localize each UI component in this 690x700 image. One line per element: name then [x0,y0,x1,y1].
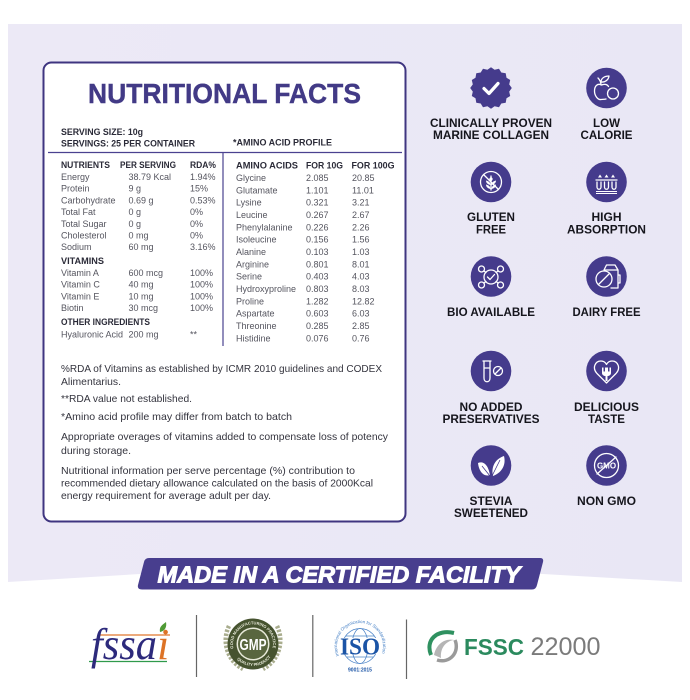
title: NUTRITIONAL FACTS [88,78,361,109]
nutrients table: RDA% [190,160,216,170]
footnotes: %RDA of Vitamins as established by ICMR 2010 guidelines and CODEX [61,363,382,375]
logo: ISO 9001:2015: ISO [340,634,380,660]
footnotes: energy requirement for average adult per day. [61,490,271,502]
amino acids table: Glycine [236,173,266,183]
nutrients table: Carbohydrate [61,195,116,205]
amino acids table: Arginine [236,259,269,269]
amino acids table: Threonine [236,321,277,331]
amino acids table: 4.03 [352,272,370,282]
amino acids table: 8.03 [352,284,370,294]
amino acids table: 6.03 [352,309,370,319]
nutrients table: OTHER INGREDIENTS [61,317,150,327]
amino acids table: Glutamate [236,185,278,195]
feature: low calorie: LOW [593,116,621,130]
nutrients table: 15% [190,184,208,194]
logo: FSSC 22000 [429,632,600,661]
amino acids table: 2.085 [306,173,329,183]
amino acids table: 2.67 [352,210,370,220]
amino acids table: Serine [236,272,262,282]
nutrients table: PER SERVING [120,160,176,170]
feature: non gmo: NON GMO [577,494,636,508]
nutrients table: 100% [190,291,213,301]
amino acids table: 0.803 [306,284,329,294]
amino acids table: 20.85 [352,173,375,183]
feature: low calorie [580,68,632,142]
amino acids table: 0.603 [306,309,329,319]
amino acids table: 2.85 [352,321,370,331]
nutrients table: 0% [190,207,203,217]
feature: no added preservatives [442,351,540,426]
nutrients table: 40 mg [128,280,154,290]
feature: gluten free [467,162,515,236]
amino acids table: 0.226 [306,222,329,232]
logo: fssai: fssa [91,620,157,669]
feature: clinically proven marine collagen [430,67,552,142]
amino acids table: Hydroxyproline [236,284,296,294]
amino acids table: Leucine [236,210,268,220]
nutrients table: Total Fat [61,207,96,217]
nutrients table: Sodium [61,242,92,252]
footnotes: *Amino acid profile may differ from batch to batch [61,411,292,423]
amino acids table: Aspartate [236,309,275,319]
feature: gluten free: GLUTEN [467,210,515,224]
feature: clinically proven marine collagen: MARINE COLLAGEN [433,128,549,142]
logo divider [312,615,314,677]
amino acids table: 0.267 [306,210,329,220]
nutrients table [61,160,216,340]
nutrients table: VITAMINS [61,256,104,266]
feature: bio available: BIO AVAILABLE [447,305,535,319]
feature: high absorption [567,162,646,236]
logo: ISO 9001:2015: International Organization for Standardization [334,620,386,656]
banner: made in a certified facility: MADE IN A CERTIFIED FACILITY [158,562,523,588]
feature: no added preservatives: NO ADDED [460,400,523,414]
amino acids table: 0.156 [306,235,329,245]
nutrients table: 0.69 g [128,195,154,205]
nutrients table: 100% [190,280,213,290]
amino acids table: 0.321 [306,198,329,208]
amino acids table: 1.101 [306,185,329,195]
footnotes: **RDA value not established. [61,393,192,405]
footnotes [61,363,389,502]
amino acids table: 1.56 [352,235,370,245]
nutrition card [44,62,406,522]
nutrients table: 0 g [128,219,141,229]
amino acids table: 11.01 [352,185,374,195]
logo: FSSC 22000: 22000 [530,633,600,661]
amino acids table: 0.285 [306,321,329,331]
feature: stevia sweetened: SWEETENED [454,506,528,520]
feature: clinically proven marine collagen: CLINICALLY PROVEN [430,116,552,130]
logo divider [406,620,408,679]
nutrients table: 9 g [128,184,141,194]
feature: high absorption: HIGH [592,210,622,224]
amino acids table: 3.21 [352,198,370,208]
amino acid profile heading: *AMINO ACID PROFILE [233,138,332,148]
amino acids table: Alanine [236,247,266,257]
amino acids table: Isoleucine [236,235,277,245]
feature: delicious taste: TASTE [588,412,625,426]
feature: gluten free: FREE [476,222,506,236]
amino acids table: 0.801 [306,259,329,269]
nutrients table: 100% [190,303,213,313]
nutrients table: 10 mg [128,291,154,301]
logo divider [196,615,198,677]
serving information: SERVINGS: 25 PER CONTAINER [61,138,195,148]
nutrients table: Hyaluronic Acid [61,330,123,340]
nutrients table: Protein [61,184,90,194]
footnotes: recommended dietary allowance calculated on the basis of 2000Kcal [61,478,373,490]
logo: GMP badge [224,618,282,671]
amino acids table: 2.26 [352,222,370,232]
feature: stevia sweetened: STEVIA [470,494,513,508]
nutrients table: 0.53% [190,195,216,205]
logo: FSSC 22000: FSSC [464,634,524,660]
nutrients table: 30 mcg [128,303,158,313]
amino acids table: 8.01 [352,259,370,269]
nutrients table: 0% [190,219,203,229]
feature: no added preservatives: PRESERVATIVES [442,412,540,426]
feature: non gmo [577,445,636,508]
feature: delicious taste: DELICIOUS [574,400,639,414]
nutrients table: 38.79 Kcal [128,172,171,182]
nutrients table: 0 g [128,207,141,217]
footnotes: Nutritional information per serve percentage (%) contribution to [61,465,355,477]
logo: fssai: i [157,620,169,669]
nutrients table: 200 mg [128,330,159,340]
amino acids table: 0.403 [306,272,329,282]
amino acids table: Phenylalanine [236,222,293,232]
feature: stevia sweetened [454,445,528,520]
nutrients table: 60 mg [128,242,154,252]
nutrients table: 0 mg [128,230,149,240]
nutrients table: Cholesterol [61,230,107,240]
footnotes: Appropriate overages of vitamins added to compensate loss of potency [61,431,389,443]
logo: ISO 9001:2015 [334,620,386,674]
amino acids table: AMINO ACIDS [236,160,298,170]
amino acids table: 0.76 [352,333,370,343]
serving information [61,127,195,148]
feature: dairy free [572,256,640,319]
amino acids table [236,160,394,343]
nutrients table: NUTRIENTS [61,160,110,170]
feature: bio available [447,256,535,319]
nutrients table: ** [190,330,198,340]
amino acids table: Lysine [236,198,262,208]
nutrients table: 600 mcg [128,268,163,278]
feature: non gmo: GMO [597,462,616,470]
logo: ISO 9001:2015: 9001:2015 [348,668,372,674]
nutrients table: Energy [61,172,90,182]
nutrients table: Biotin [61,303,84,313]
table rules [48,152,402,346]
amino acids table: 0.076 [306,333,329,343]
amino acids table: 0.103 [306,247,329,257]
footnotes: during storage. [61,445,131,457]
amino acids table: FOR 100G [352,160,394,170]
nutrients table: 1.94% [190,172,216,182]
nutrients table: Vitamin E [61,291,99,301]
amino acids table: Proline [236,296,264,306]
nutrients table: 0% [190,230,203,240]
logo: GMP badge: GOOD MANUFACTURING PRACTICE [230,622,276,649]
feature: delicious taste [574,351,639,426]
serving information: SERVING SIZE: 10g [61,127,143,137]
amino acids table: Histidine [236,333,271,343]
amino acids table: FOR 10G [306,160,343,170]
feature: dairy free: DAIRY FREE [572,305,640,319]
nutrients table: Total Sugar [61,219,107,229]
logo: GMP badge: QUALITY PRODUCT [238,655,270,666]
nutrients table: 100% [190,268,213,278]
logo: GMP badge: GMP [240,637,266,654]
footnotes: Alimentarius. [61,376,121,388]
nutrients table: Vitamin A [61,268,99,278]
feature: low calorie: CALORIE [580,128,632,142]
nutrients table: Vitamin C [61,280,100,290]
amino acids table: 1.03 [352,247,370,257]
amino acids table: 12.82 [352,296,375,306]
nutrients table: 3.16% [190,242,216,252]
feature: high absorption: ABSORPTION [567,222,646,236]
amino acids table: 1.282 [306,296,329,306]
background panel [8,24,682,582]
